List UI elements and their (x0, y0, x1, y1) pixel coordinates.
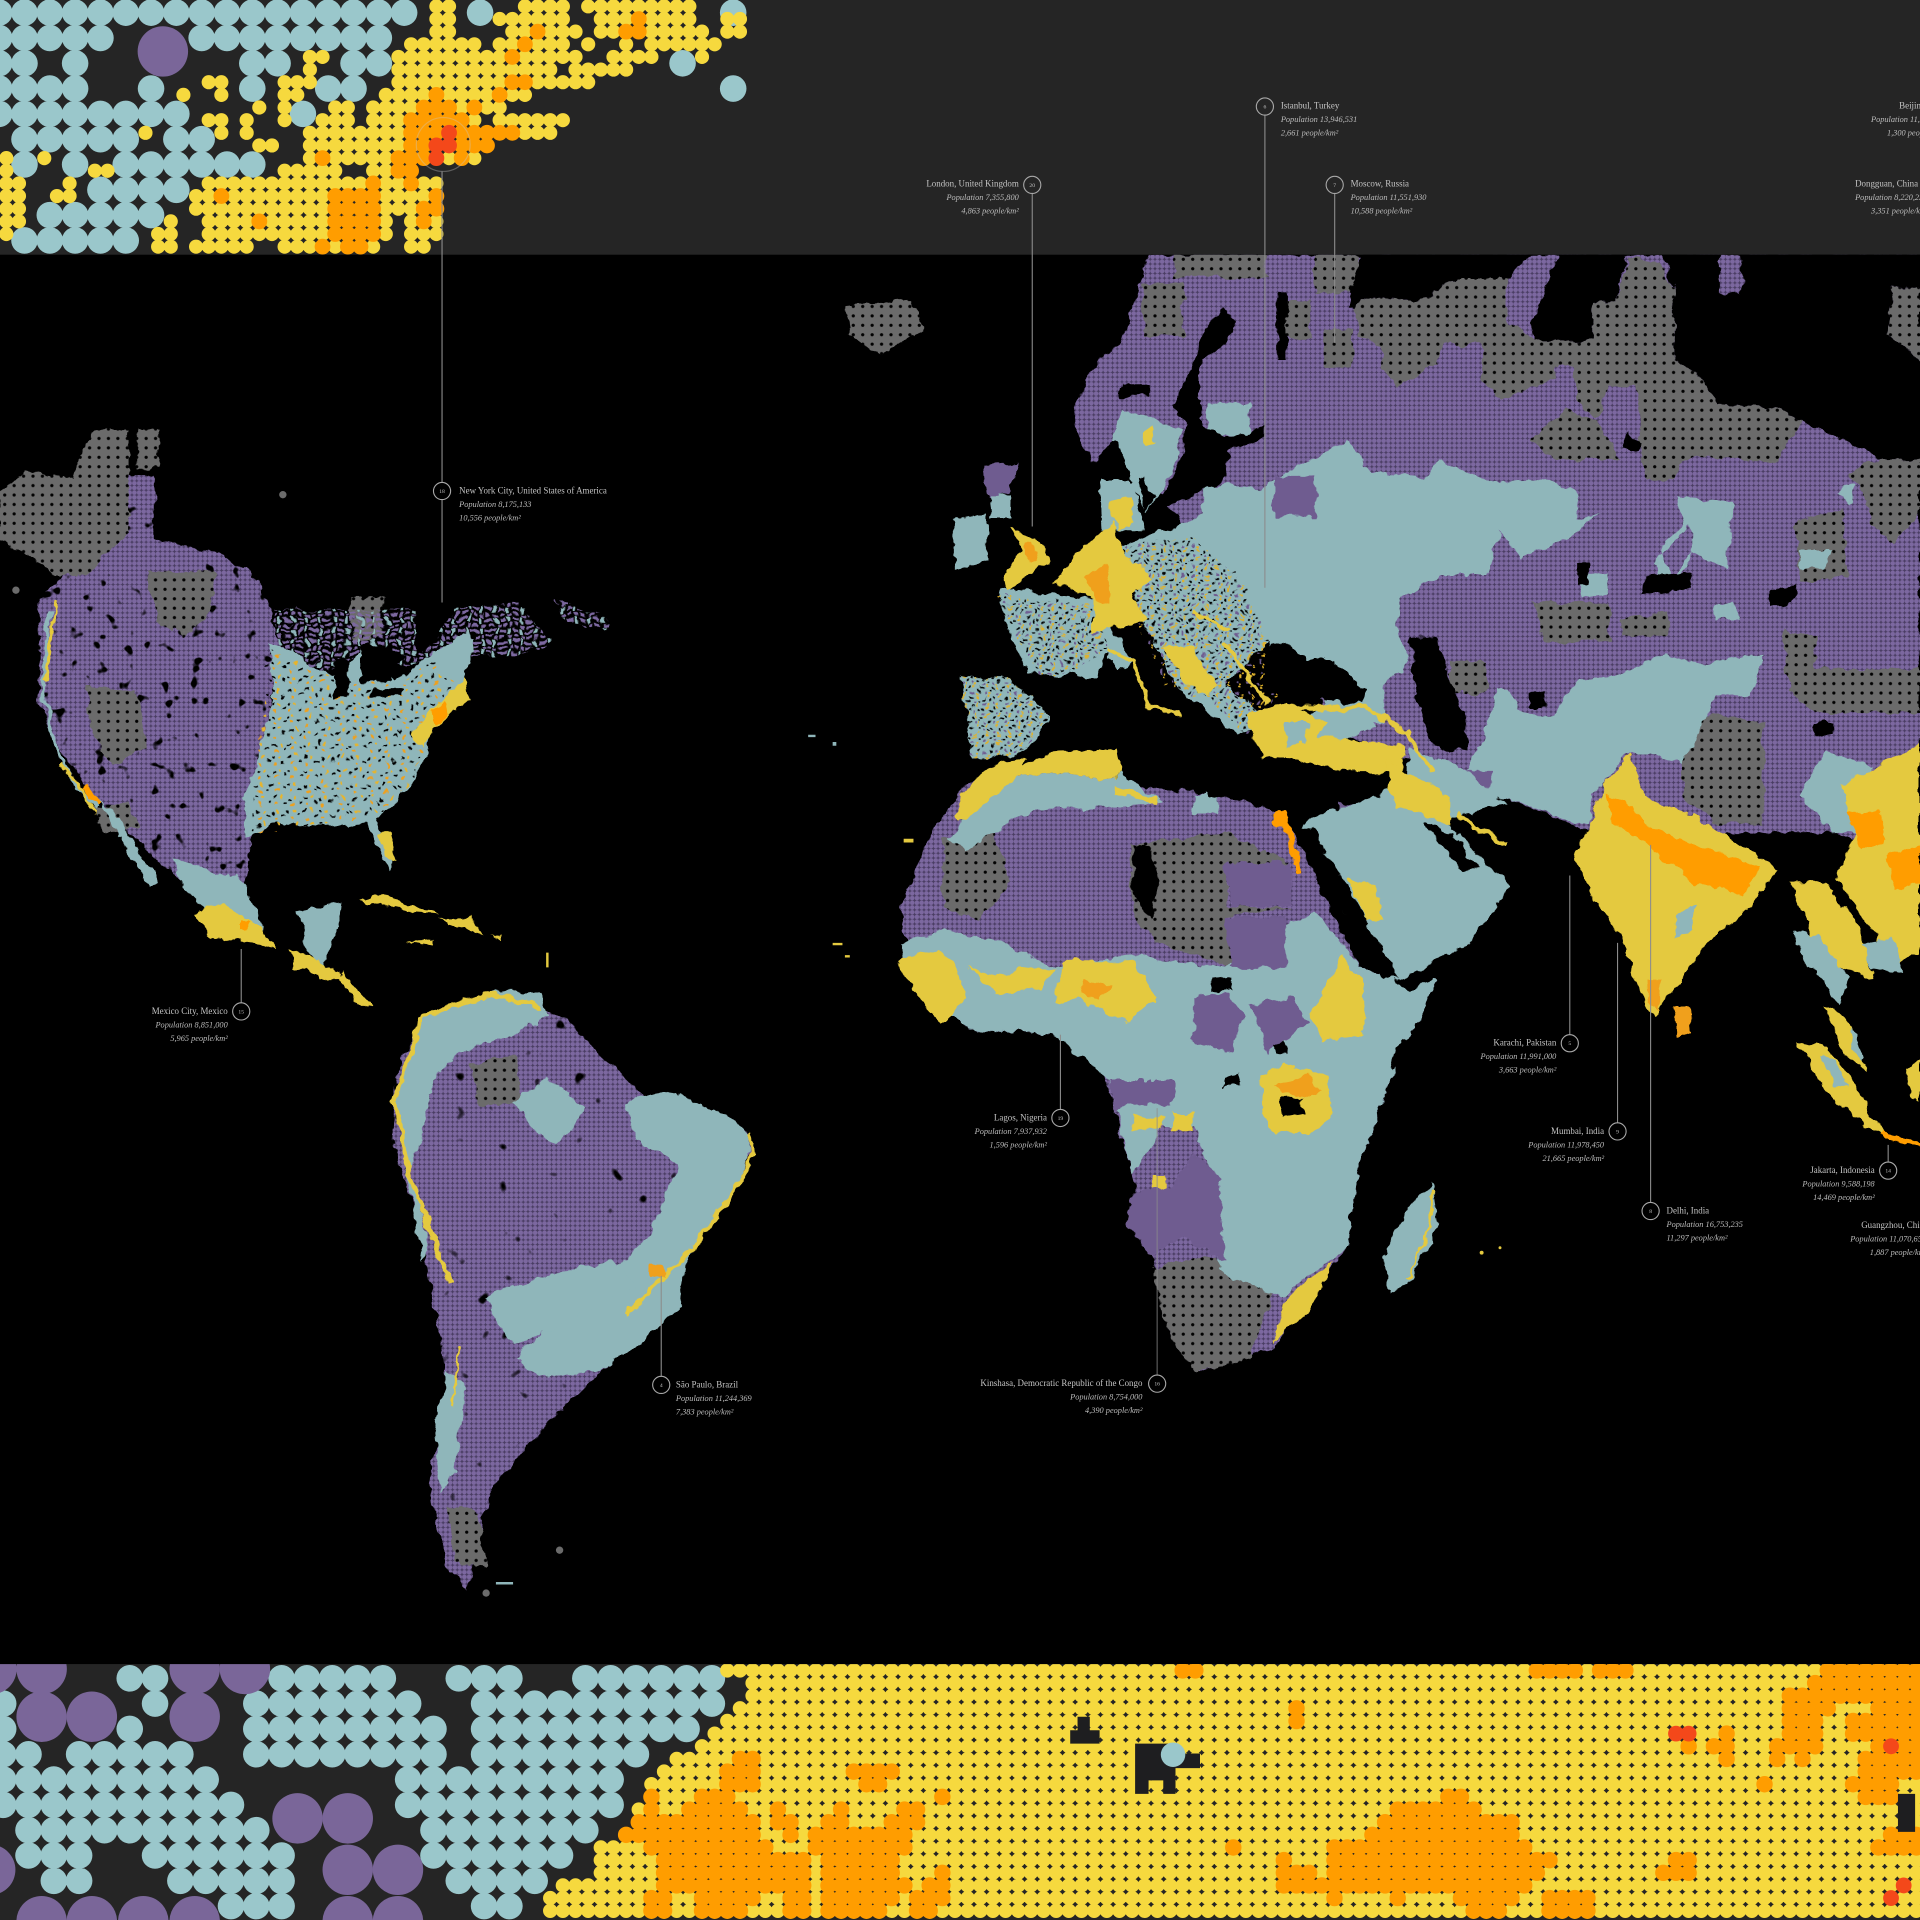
callout: Jakarta: 14,469 people/km² (1813, 1193, 1875, 1202)
Africa (900, 749, 1445, 1341)
callout: London: Population 7,355,800 (945, 193, 1020, 202)
callout: São Paulo: Population 11,244,369 (675, 1394, 753, 1403)
callout: Lagos (974, 1035, 1069, 1149)
callout: Moscow (1326, 176, 1427, 343)
callout: Mumbai: Population 11,978,450 (1527, 1140, 1605, 1149)
low density land (0, 255, 1920, 1664)
callout: Guangzhou (1849, 1220, 1920, 1257)
callout: Karachi (1480, 876, 1578, 1075)
callout: Beijing (1870, 100, 1920, 137)
inset: New York detail (0, 6, 740, 247)
callout: London: 20 (1029, 183, 1035, 189)
callout: Moscow: Moscow, Russia (1351, 179, 1409, 189)
callout: London (926, 176, 1041, 527)
teal dots (0, 13, 733, 240)
top band (0, 0, 1920, 255)
callout: São Paulo: 7,383 people/km² (676, 1407, 734, 1416)
orange high density (221, 19, 639, 247)
very low density land (0, 255, 1920, 1664)
Europe and Asia (954, 245, 1920, 1146)
callout: Moscow: 7 (1333, 183, 1336, 189)
callout: Delhi: Delhi, India (1667, 1205, 1709, 1215)
yellow dots (550, 1670, 1920, 1911)
callout: Mumbai (1527, 943, 1626, 1163)
callout: Istanbul: 2,661 people/km² (1281, 128, 1339, 137)
yellow dots (6, 6, 740, 247)
callout: Mumbai: Mumbai, India (1551, 1126, 1604, 1136)
callout: Lagos: 1,596 people/km² (990, 1140, 1047, 1149)
callout: Dongguan: Dongguan, China (1855, 179, 1918, 189)
red core (1676, 1734, 1904, 1898)
callout: New York City: 18 (439, 489, 445, 495)
callout: Dongguan (1854, 179, 1920, 216)
callout: London: 4,863 people/km² (961, 207, 1019, 216)
callout: Lagos: Population 7,937,932 (974, 1127, 1047, 1136)
callout: Mumbai: 9 (1616, 1129, 1619, 1135)
callout: Istanbul: Population 13,946,531 (1280, 115, 1357, 124)
callout: Jakarta (1801, 1145, 1897, 1202)
callout: Delhi: 11,297 people/km² (1667, 1233, 1728, 1242)
callout: São Paulo: 4 (660, 1383, 663, 1389)
callout: Karachi: Karachi, Pakistan (1493, 1038, 1557, 1048)
callout: London: London, United Kingdom (926, 179, 1019, 189)
callout: Moscow: Population 11,551,930 (1350, 193, 1427, 202)
inset: dense region detail (0, 1644, 1920, 1920)
purple dot (138, 26, 188, 77)
callout: New York City: 10,556 people/km² (459, 513, 521, 522)
callout: Istanbul: 6 (1263, 104, 1266, 110)
callout: New York City: New York City, United States of America (459, 485, 607, 495)
focus ring (416, 118, 470, 171)
callout: Karachi: Population 11,991,000 (1480, 1052, 1557, 1061)
teal dots (3, 1678, 712, 1906)
callout: Mumbai: 21,665 people/km² (1542, 1154, 1605, 1163)
callout: New York City (433, 171, 607, 602)
orange high density (626, 1670, 1916, 1911)
callout: Mexico City: 15 (238, 1009, 244, 1015)
red core (436, 133, 449, 158)
callout: São Paulo: São Paulo, Brazil (676, 1379, 739, 1389)
callout: Delhi: 8 (1649, 1209, 1652, 1215)
callout: Mexico City: Mexico City, Mexico (152, 1006, 228, 1016)
callout: Mexico City: 5,965 people/km² (170, 1034, 228, 1043)
callout: Karachi: 5 (1568, 1041, 1571, 1047)
islands (12, 491, 1501, 1597)
purple dots (0, 1644, 423, 1920)
callout: Moscow: 10,588 people/km² (1351, 207, 1413, 216)
South America (394, 992, 753, 1494)
callout: Mexico City: Population 8,851,000 (154, 1020, 229, 1029)
holes (1070, 1717, 1915, 1832)
callout: Kinshasa: Population 8,754,000 (1069, 1393, 1143, 1402)
callout: Karachi: 3,663 people/km² (1498, 1066, 1557, 1075)
callout: Mexico City (152, 949, 250, 1043)
callout: New York City: Population 8,175,133 (458, 500, 531, 509)
callout: Jakarta: 14 (1885, 1169, 1891, 1175)
callout: São Paulo (653, 1276, 753, 1416)
callout: Delhi: Population 16,753,235 (1666, 1220, 1743, 1229)
callout: Lagos: 19 (1058, 1116, 1063, 1122)
callout: Kinshasa: 16 (1154, 1382, 1160, 1388)
callout: Jakarta: Jakarta, Indonesia (1810, 1165, 1875, 1175)
callout: Delhi (1642, 845, 1743, 1242)
bottom band (0, 1664, 1920, 1920)
world map (0, 245, 1920, 1664)
callout: Kinshasa (980, 1108, 1166, 1415)
callout: Kinshasa: 4,390 people/km² (1085, 1406, 1143, 1415)
callout: Istanbul (1256, 98, 1357, 588)
callout: Jakarta: Population 9,588,198 (1801, 1180, 1876, 1189)
North America (43, 600, 606, 1010)
callout: Istanbul: Istanbul, Turkey (1281, 100, 1340, 110)
callout: Kinshasa: Kinshasa, Democratic Republic of the Congo (980, 1378, 1143, 1388)
callout: Lagos: Lagos, Nigeria (994, 1112, 1047, 1122)
teal dot (1161, 1742, 1185, 1767)
